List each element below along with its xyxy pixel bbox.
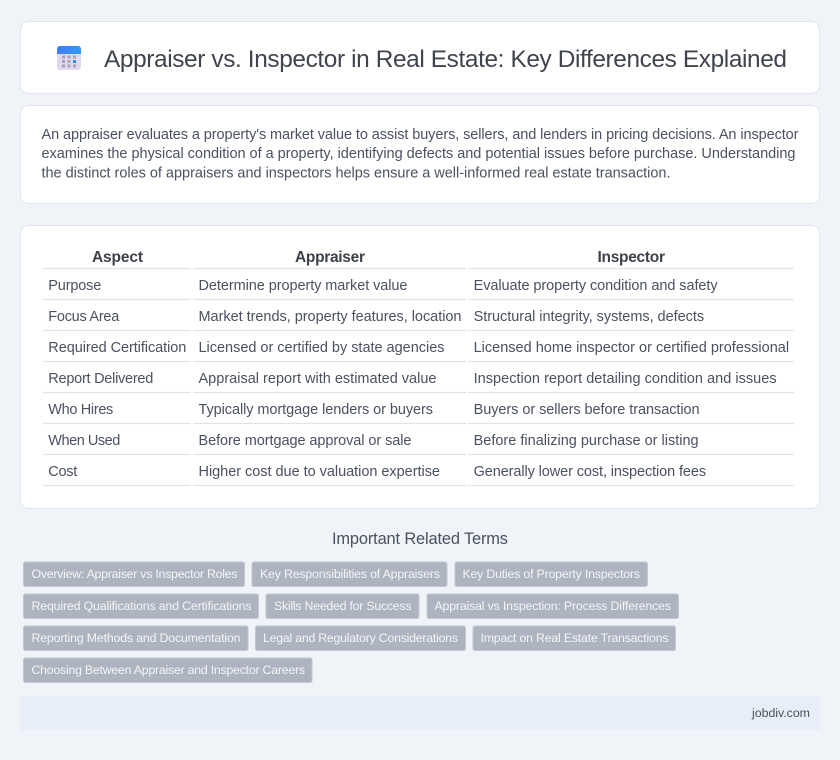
- tag: impact on transactions: Impact on Real Estate Transactions: [480, 631, 668, 645]
- tag: choosing careers: [24, 658, 312, 682]
- row: report delivered: Report Delivered: [48, 371, 153, 387]
- tag: reporting methods: Reporting Methods and Documentation: [32, 631, 241, 645]
- row: focus area: Structural integrity, systems, defects: [474, 309, 704, 325]
- tag: overview: Overview: Appraiser vs Inspector Roles: [32, 567, 238, 581]
- row: cost: [48, 464, 706, 480]
- row: focus area: Market trends, property features, location: [198, 309, 462, 325]
- row: purpose: Determine property market value: [198, 278, 408, 294]
- table header row: Appraiser: [295, 249, 365, 266]
- row: focus area: Focus Area: [48, 309, 120, 325]
- panel: introduction: [20, 106, 820, 204]
- icon: calendar: [57, 46, 81, 70]
- panel: related term tags: [24, 562, 678, 682]
- row: purpose: [48, 278, 718, 294]
- tag: legal and regulatory: Legal and Regulatory Considerations: [263, 631, 458, 645]
- row: report delivered: [48, 371, 777, 387]
- heading: important related terms: Important Related Terms: [332, 530, 508, 548]
- row: required certification: Licensed home inspector or certified professional: [474, 340, 789, 356]
- row: cost: Generally lower cost, inspection fees: [474, 464, 706, 480]
- row: report delivered: Inspection report detailing condition and issues: [474, 371, 777, 387]
- row: report delivered: Appraisal report with estimated value: [198, 371, 436, 387]
- row: who hires: Typically mortgage lenders or buyers: [198, 402, 433, 418]
- row: required certification: [48, 340, 789, 356]
- tag: overview: [24, 562, 244, 586]
- tag: impact on transactions: [473, 626, 676, 650]
- panel: comparison table: [20, 226, 820, 508]
- row: who hires: Who Hires: [48, 402, 113, 418]
- tag: legal and regulatory: [256, 626, 466, 650]
- panel: header: [20, 22, 820, 94]
- row: who hires: Buyers or sellers before transaction: [474, 402, 700, 418]
- row: cost: Higher cost due to valuation expertise: [198, 464, 440, 480]
- tag: key duties: Key Duties of Property Inspectors: [462, 567, 640, 581]
- title: Appraiser vs. Inspector in Real Estate: Key Differences Explained: [104, 46, 787, 73]
- tag: process differences: [427, 594, 678, 618]
- tag: required qualifications: Required Qualifications and Certifications: [32, 599, 252, 613]
- text block: introduction paragraph: the distinct roles of appraisers and inspectors helps ensure a well-informed real estate transaction.: [42, 166, 670, 182]
- table header row: Aspect: [92, 249, 143, 266]
- tag: key responsibilities: Key Responsibilities of Appraisers: [260, 567, 440, 581]
- table header row: [92, 249, 665, 266]
- row: when used: Before mortgage approval or sale: [198, 433, 412, 449]
- row: required certification: Licensed or certified by state agencies: [198, 340, 444, 356]
- row: who hires: [48, 402, 700, 418]
- row: when used: [48, 433, 699, 449]
- tag: skills needed: Skills Needed for Success: [274, 599, 412, 613]
- tag: skills needed: [266, 594, 419, 618]
- row: purpose: Evaluate property condition and safety: [474, 278, 718, 294]
- tag: key duties: [455, 562, 648, 586]
- row: purpose: Purpose: [48, 278, 101, 294]
- row: when used: Before finalizing purchase or listing: [474, 433, 699, 449]
- row: focus area: [48, 309, 704, 325]
- tag: process differences: Appraisal vs Inspection: Process Differences: [434, 599, 671, 613]
- tag: choosing careers: Choosing Between Appraiser and Inspector Careers: [32, 663, 305, 677]
- text block: introduction paragraph: [42, 127, 799, 182]
- table header row: Inspector: [598, 249, 665, 266]
- tag: required qualifications: [24, 594, 258, 618]
- tag: key responsibilities: [252, 562, 447, 586]
- tag: reporting methods: [24, 626, 248, 650]
- footer: jobdiv.com: [751, 706, 810, 720]
- text block: introduction paragraph: examines the physical condition of a property, identifying defects and potential issues before purchase. Understanding: [42, 146, 796, 162]
- row: cost: Cost: [48, 464, 77, 480]
- footer: [20, 696, 820, 730]
- row: when used: When Used: [48, 433, 120, 449]
- text block: introduction paragraph: An appraiser evaluates a property's market value to assist buyers, sellers, and lenders in pricing decisions. An inspector: [42, 127, 799, 143]
- row: required certification: Required Certification: [48, 340, 186, 356]
